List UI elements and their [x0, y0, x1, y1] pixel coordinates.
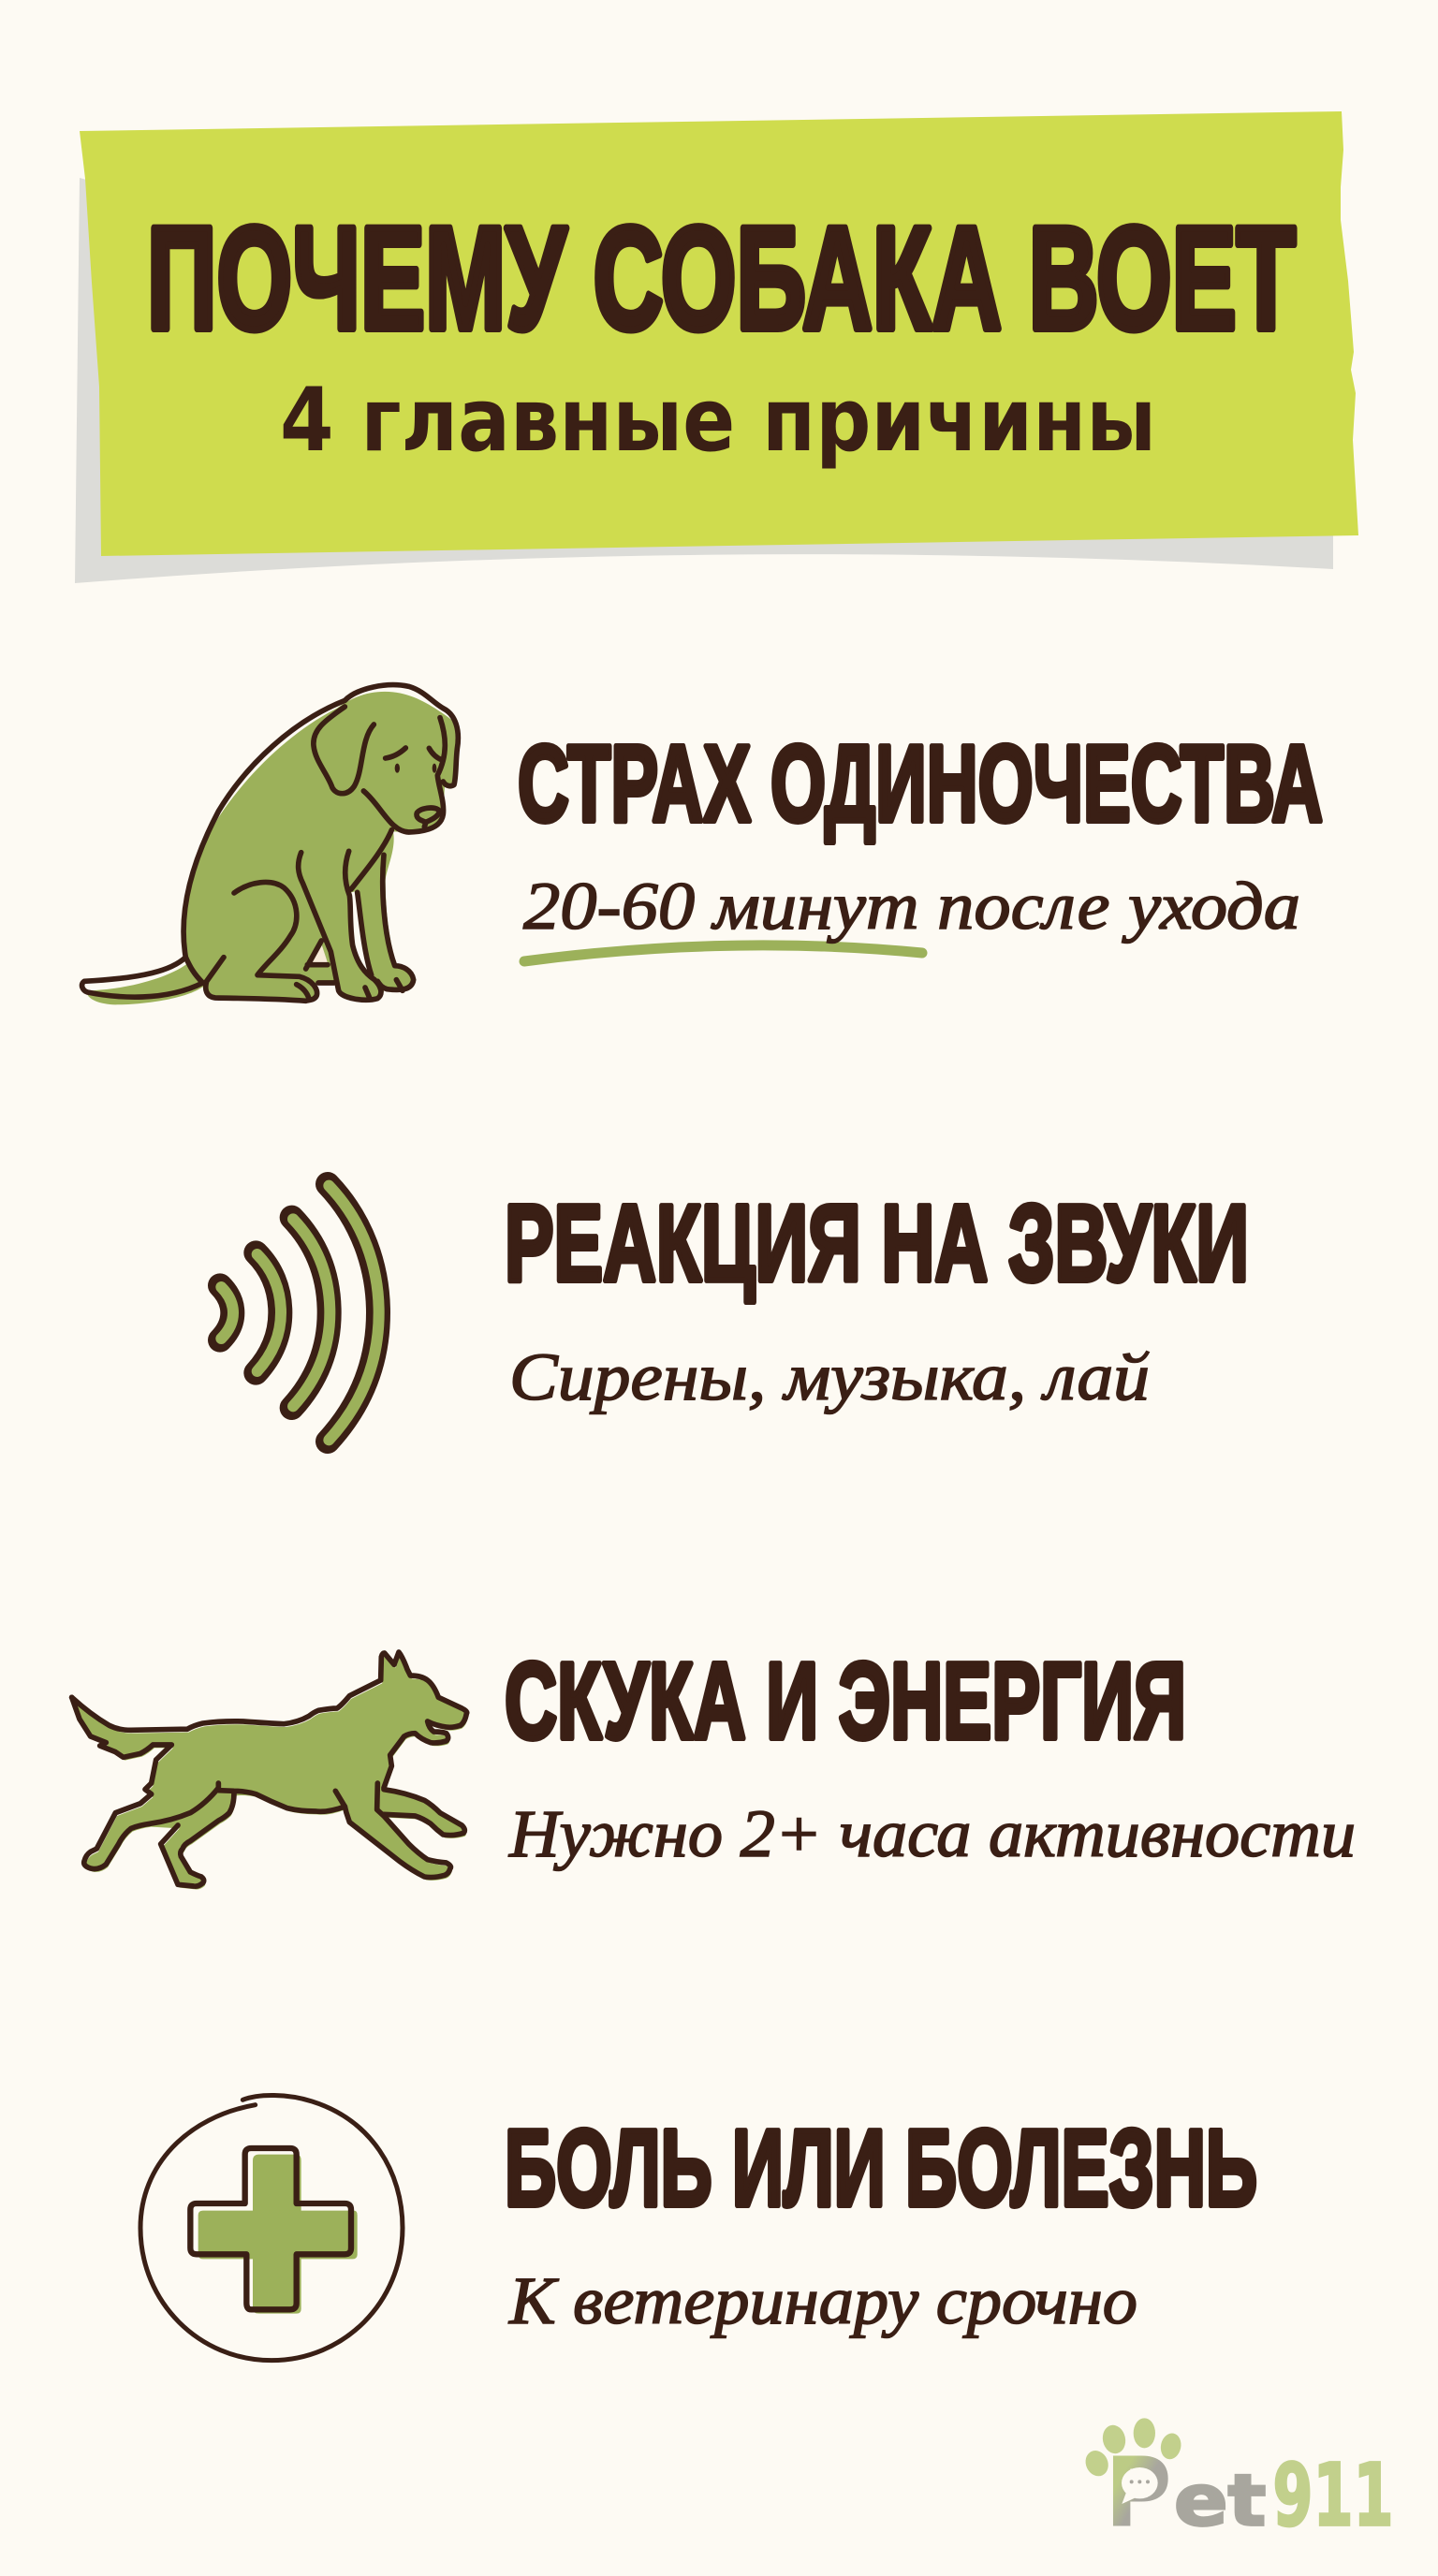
subtext: Нужно 2+ часа активности [508, 1796, 1356, 1871]
row: fear of loneliness [82, 685, 1323, 1004]
icon: sad sitting dog [82, 685, 459, 1004]
underline highlight [524, 945, 922, 961]
icon: sound waves [220, 1184, 379, 1442]
logo: Pet911 [1081, 2418, 1394, 2549]
row: reaction to sounds [220, 1182, 1249, 1442]
banner tape [80, 111, 1358, 556]
gap between front legs [351, 891, 372, 976]
subtext: 20-60 минут после ухода [523, 869, 1300, 944]
logo wordmark [1105, 2437, 1394, 2549]
icon: medical cross in circle [140, 2096, 403, 2361]
subtext: Сирены, музыка, лай [509, 1339, 1150, 1414]
logo wordmark: P [1105, 2437, 1172, 2549]
subtitle: 4 главные причины [280, 370, 1156, 472]
panel: title banner [75, 111, 1358, 583]
subtext: К ветеринару срочно [508, 2263, 1137, 2338]
gap under belly [308, 944, 329, 965]
banner shadow [75, 178, 1333, 583]
icon: paw toes [1081, 2418, 1183, 2480]
logo wordmark: et [1174, 2458, 1266, 2541]
row: pain or illness [140, 2096, 1257, 2361]
row: boredom and energy [72, 1640, 1356, 1890]
icon: running dog [72, 1652, 468, 1890]
